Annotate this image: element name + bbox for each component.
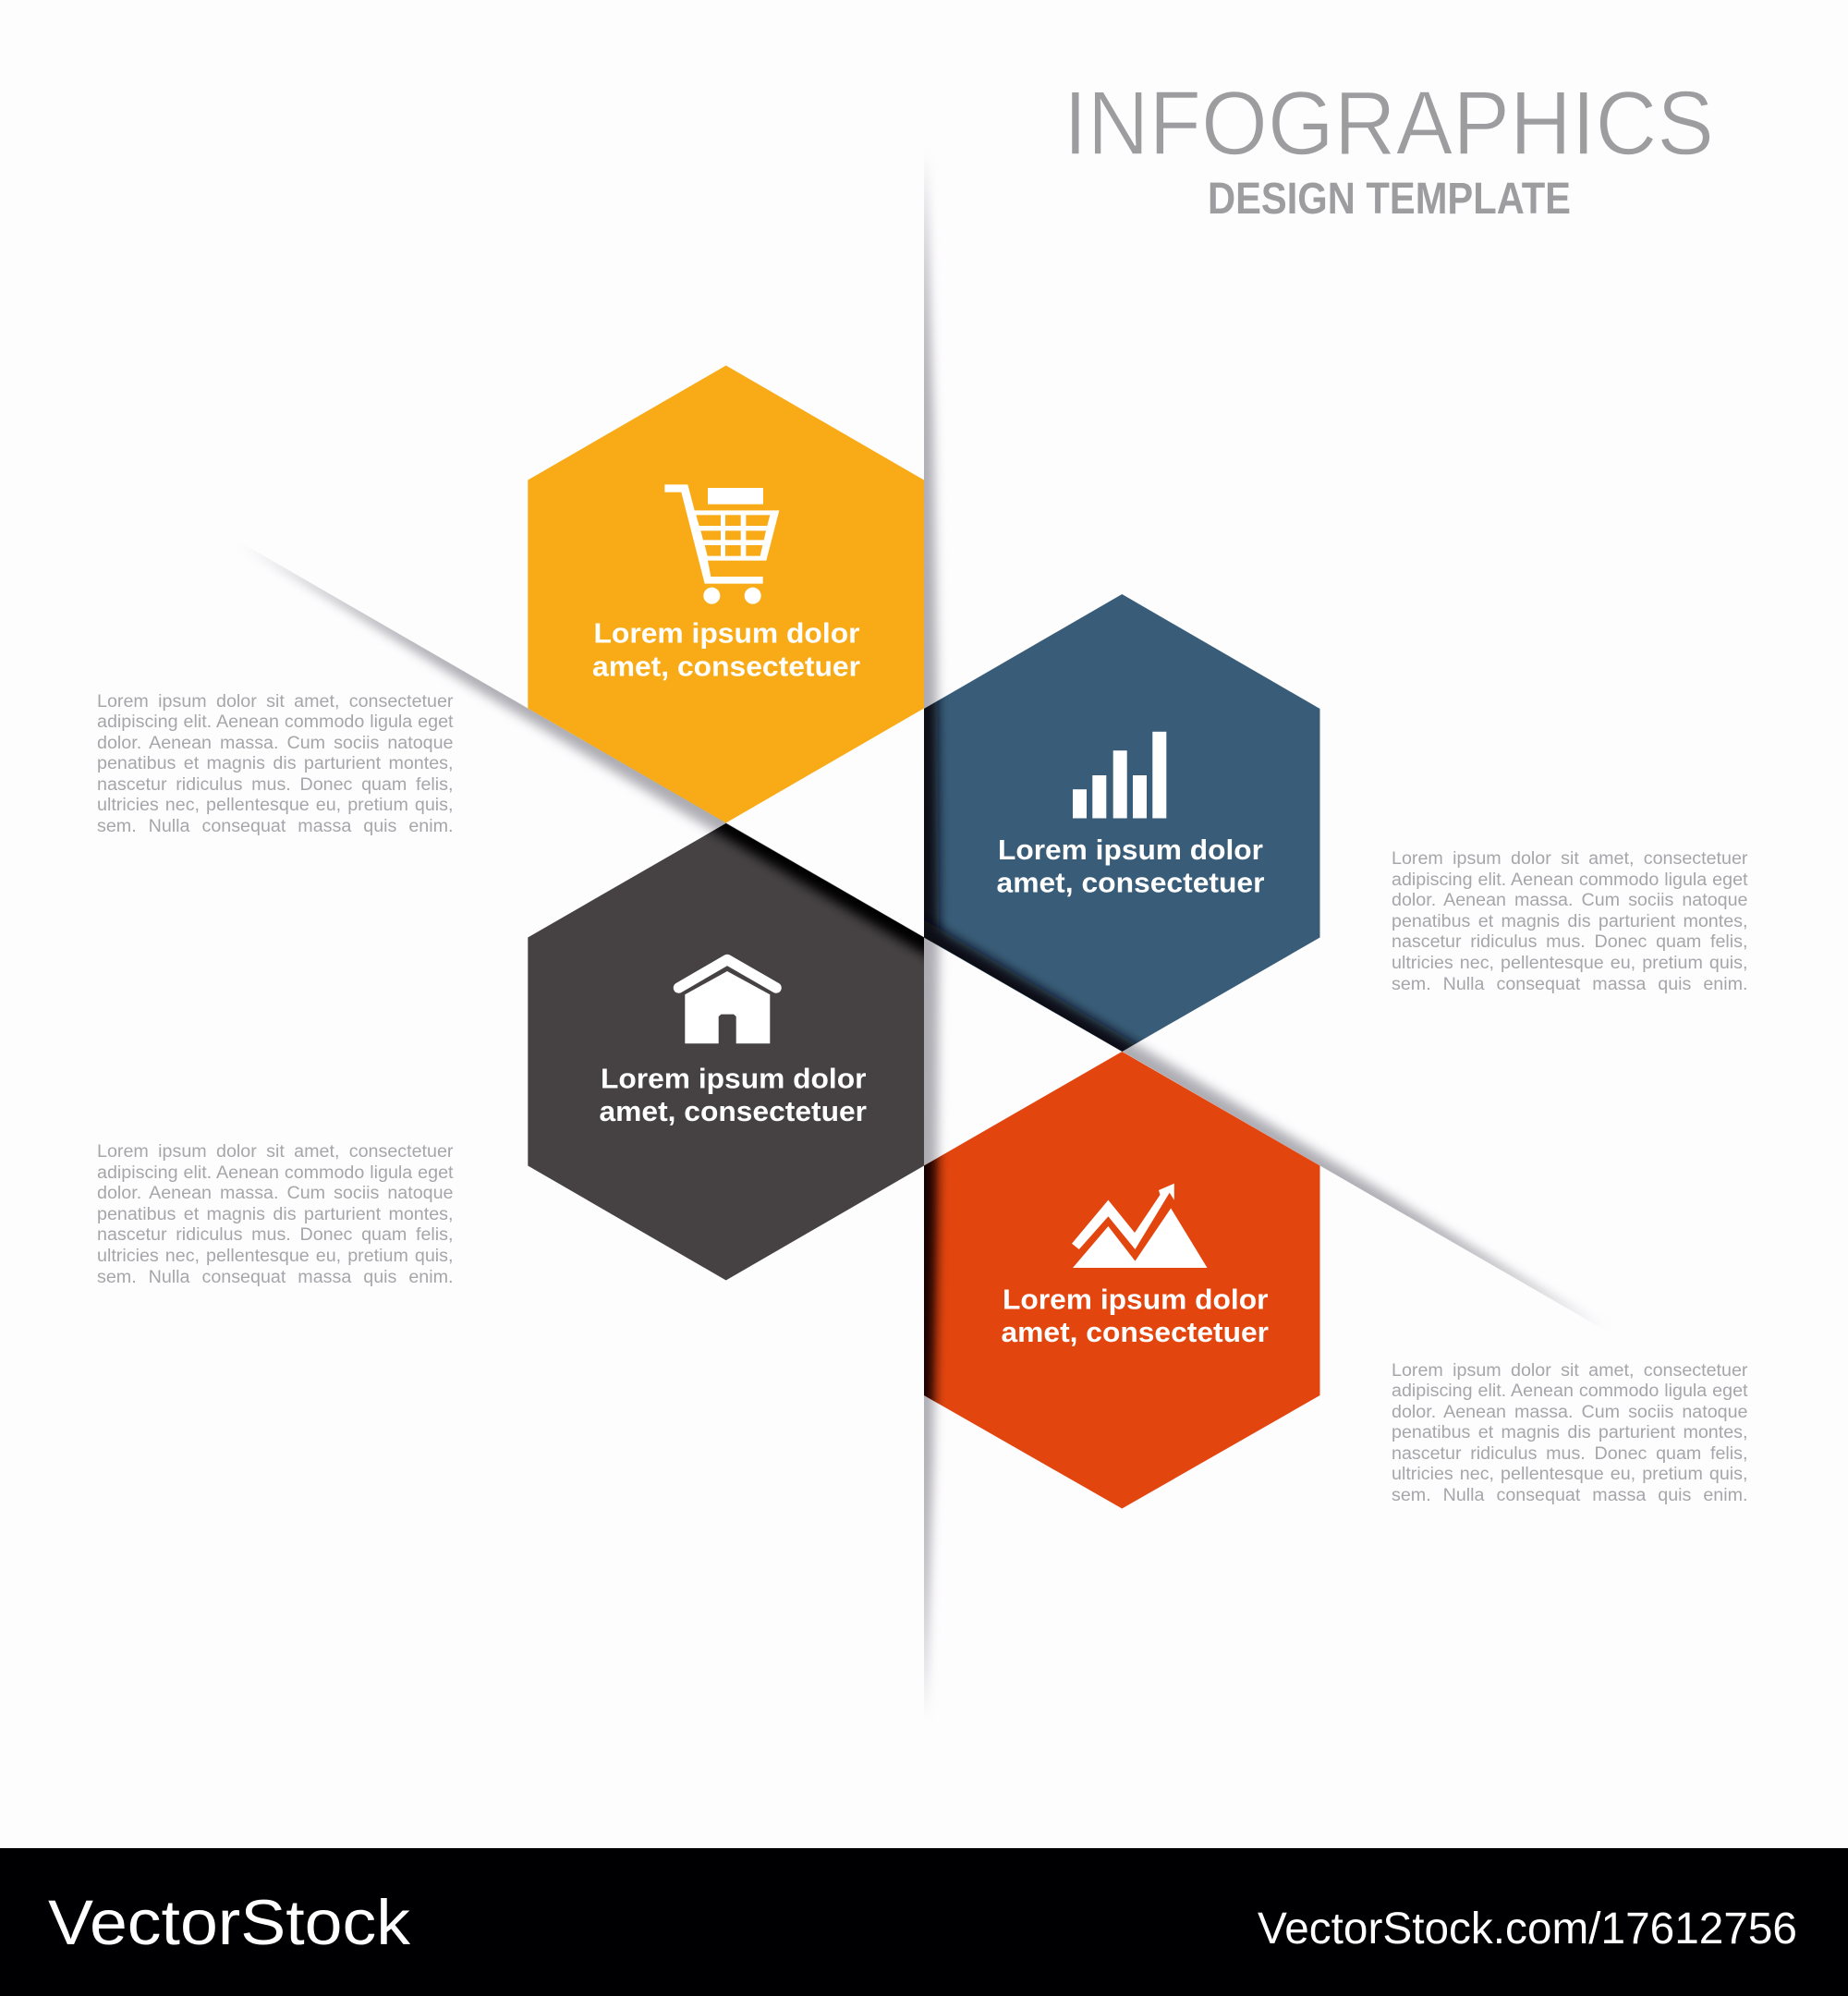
text block: lower left: nascetur ridiculus mus. Donec quam felis, bbox=[97, 1224, 453, 1245]
text block: upper right bbox=[1392, 848, 1748, 994]
subheading: design template: DESIGN TEMPLATE bbox=[1208, 175, 1571, 224]
icon: mountain chart with arrow bbox=[1072, 1184, 1207, 1268]
vertical fold shadow bbox=[924, 174, 946, 1698]
text block: lower right: adipiscing elit. Aenean commodo ligula eget bbox=[1392, 1381, 1748, 1401]
label: blue hexagon: Lorem ipsum dolor bbox=[998, 834, 1263, 866]
label: orange hexagon: amet, consectetuer bbox=[1002, 1316, 1269, 1348]
label: dark hexagon bbox=[599, 1063, 867, 1127]
icon: bar chart bbox=[1073, 732, 1166, 819]
text block: lower left: ultricies nec, pellentesque eu, pretium quis, bbox=[97, 1246, 453, 1266]
label: yellow hexagon bbox=[592, 617, 860, 682]
text block: upper left: Lorem ipsum dolor sit amet, consectetuer bbox=[97, 691, 453, 712]
text block: upper left: penatibus et magnis dis parturient montes, bbox=[97, 753, 453, 773]
fold shadows on the background bbox=[235, 152, 1613, 1719]
text block: upper right: ultricies nec, pellentesque eu, pretium quis, bbox=[1392, 953, 1748, 973]
fold shadow on dark hexagon bbox=[707, 823, 924, 961]
text block: upper right: sem. Nulla consequat massa quis enim. bbox=[1392, 974, 1748, 994]
text block: upper left: ultricies nec, pellentesque eu, pretium quis, bbox=[97, 795, 453, 815]
footer brand: VectorStock bbox=[48, 1887, 411, 1958]
icon: house bbox=[678, 959, 776, 1043]
text block: upper left: dolor. Aenean massa. Cum sociis natoque bbox=[97, 733, 453, 753]
label: blue hexagon bbox=[996, 834, 1264, 898]
text block: lower right: dolor. Aenean massa. Cum sociis natoque bbox=[1392, 1402, 1748, 1422]
text block: lower left: adipiscing elit. Aenean commodo ligula eget bbox=[97, 1162, 453, 1183]
text block: lower right: Lorem ipsum dolor sit amet, consectetuer bbox=[1392, 1360, 1748, 1381]
heading: infographics: INFOGRAPHICS bbox=[1064, 72, 1714, 174]
label: dark hexagon: amet, consectetuer bbox=[599, 1095, 867, 1127]
label: yellow hexagon: Lorem ipsum dolor bbox=[593, 617, 859, 649]
panel: dark hexagon bbox=[528, 823, 924, 1281]
text block: upper right: Lorem ipsum dolor sit amet, consectetuer bbox=[1392, 848, 1748, 869]
footer url: VectorStock.com/17612756 bbox=[1258, 1905, 1797, 1953]
text block: upper left: sem. Nulla consequat massa quis enim. bbox=[97, 816, 453, 836]
text block: lower right: penatibus et magnis dis parturient montes, bbox=[1392, 1422, 1748, 1442]
text block: lower right bbox=[1392, 1360, 1748, 1505]
panel: orange hexagon bbox=[924, 1052, 1319, 1508]
text block: lower right: nascetur ridiculus mus. Donec quam felis, bbox=[1392, 1443, 1748, 1464]
text block: lower left: dolor. Aenean massa. Cum sociis natoque bbox=[97, 1183, 453, 1203]
fold shadow on orange hexagon bbox=[924, 1153, 946, 1406]
fold shadows on blue hexagon bbox=[924, 697, 1315, 1506]
text block: upper left bbox=[97, 691, 453, 836]
panel: yellow hexagon bbox=[528, 366, 924, 822]
text block: upper right: dolor. Aenean massa. Cum sociis natoque bbox=[1392, 890, 1748, 910]
text block: lower left: Lorem ipsum dolor sit amet, consectetuer bbox=[97, 1141, 453, 1162]
text block: upper right: adipiscing elit. Aenean commodo ligula eget bbox=[1392, 870, 1748, 890]
label: dark hexagon: Lorem ipsum dolor bbox=[601, 1063, 867, 1094]
text block: upper right: penatibus et magnis dis parturient montes, bbox=[1392, 911, 1748, 931]
title block bbox=[1064, 72, 1714, 224]
text block: upper right: nascetur ridiculus mus. Donec quam felis, bbox=[1392, 931, 1748, 952]
text block: lower right: ultricies nec, pellentesque eu, pretium quis, bbox=[1392, 1464, 1748, 1484]
text block: upper left: adipiscing elit. Aenean commodo ligula eget bbox=[97, 712, 453, 732]
text block: upper left: nascetur ridiculus mus. Donec quam felis, bbox=[97, 774, 453, 795]
footer bar bbox=[0, 1848, 1848, 1996]
text block: lower left: sem. Nulla consequat massa quis enim. bbox=[97, 1267, 453, 1287]
label: blue hexagon: amet, consectetuer bbox=[996, 867, 1264, 898]
text block: lower left: penatibus et magnis dis parturient montes, bbox=[97, 1204, 453, 1224]
label: orange hexagon bbox=[1002, 1283, 1269, 1348]
panel: blue hexagon bbox=[924, 594, 1319, 1052]
label: yellow hexagon: amet, consectetuer bbox=[592, 651, 860, 682]
text block: lower left bbox=[97, 1141, 453, 1287]
label: orange hexagon: Lorem ipsum dolor bbox=[1003, 1283, 1268, 1316]
text block: lower right: sem. Nulla consequat massa quis enim. bbox=[1392, 1485, 1748, 1505]
diagonal fold shadow bbox=[235, 530, 1613, 1344]
icon: shopping cart bbox=[664, 484, 779, 604]
